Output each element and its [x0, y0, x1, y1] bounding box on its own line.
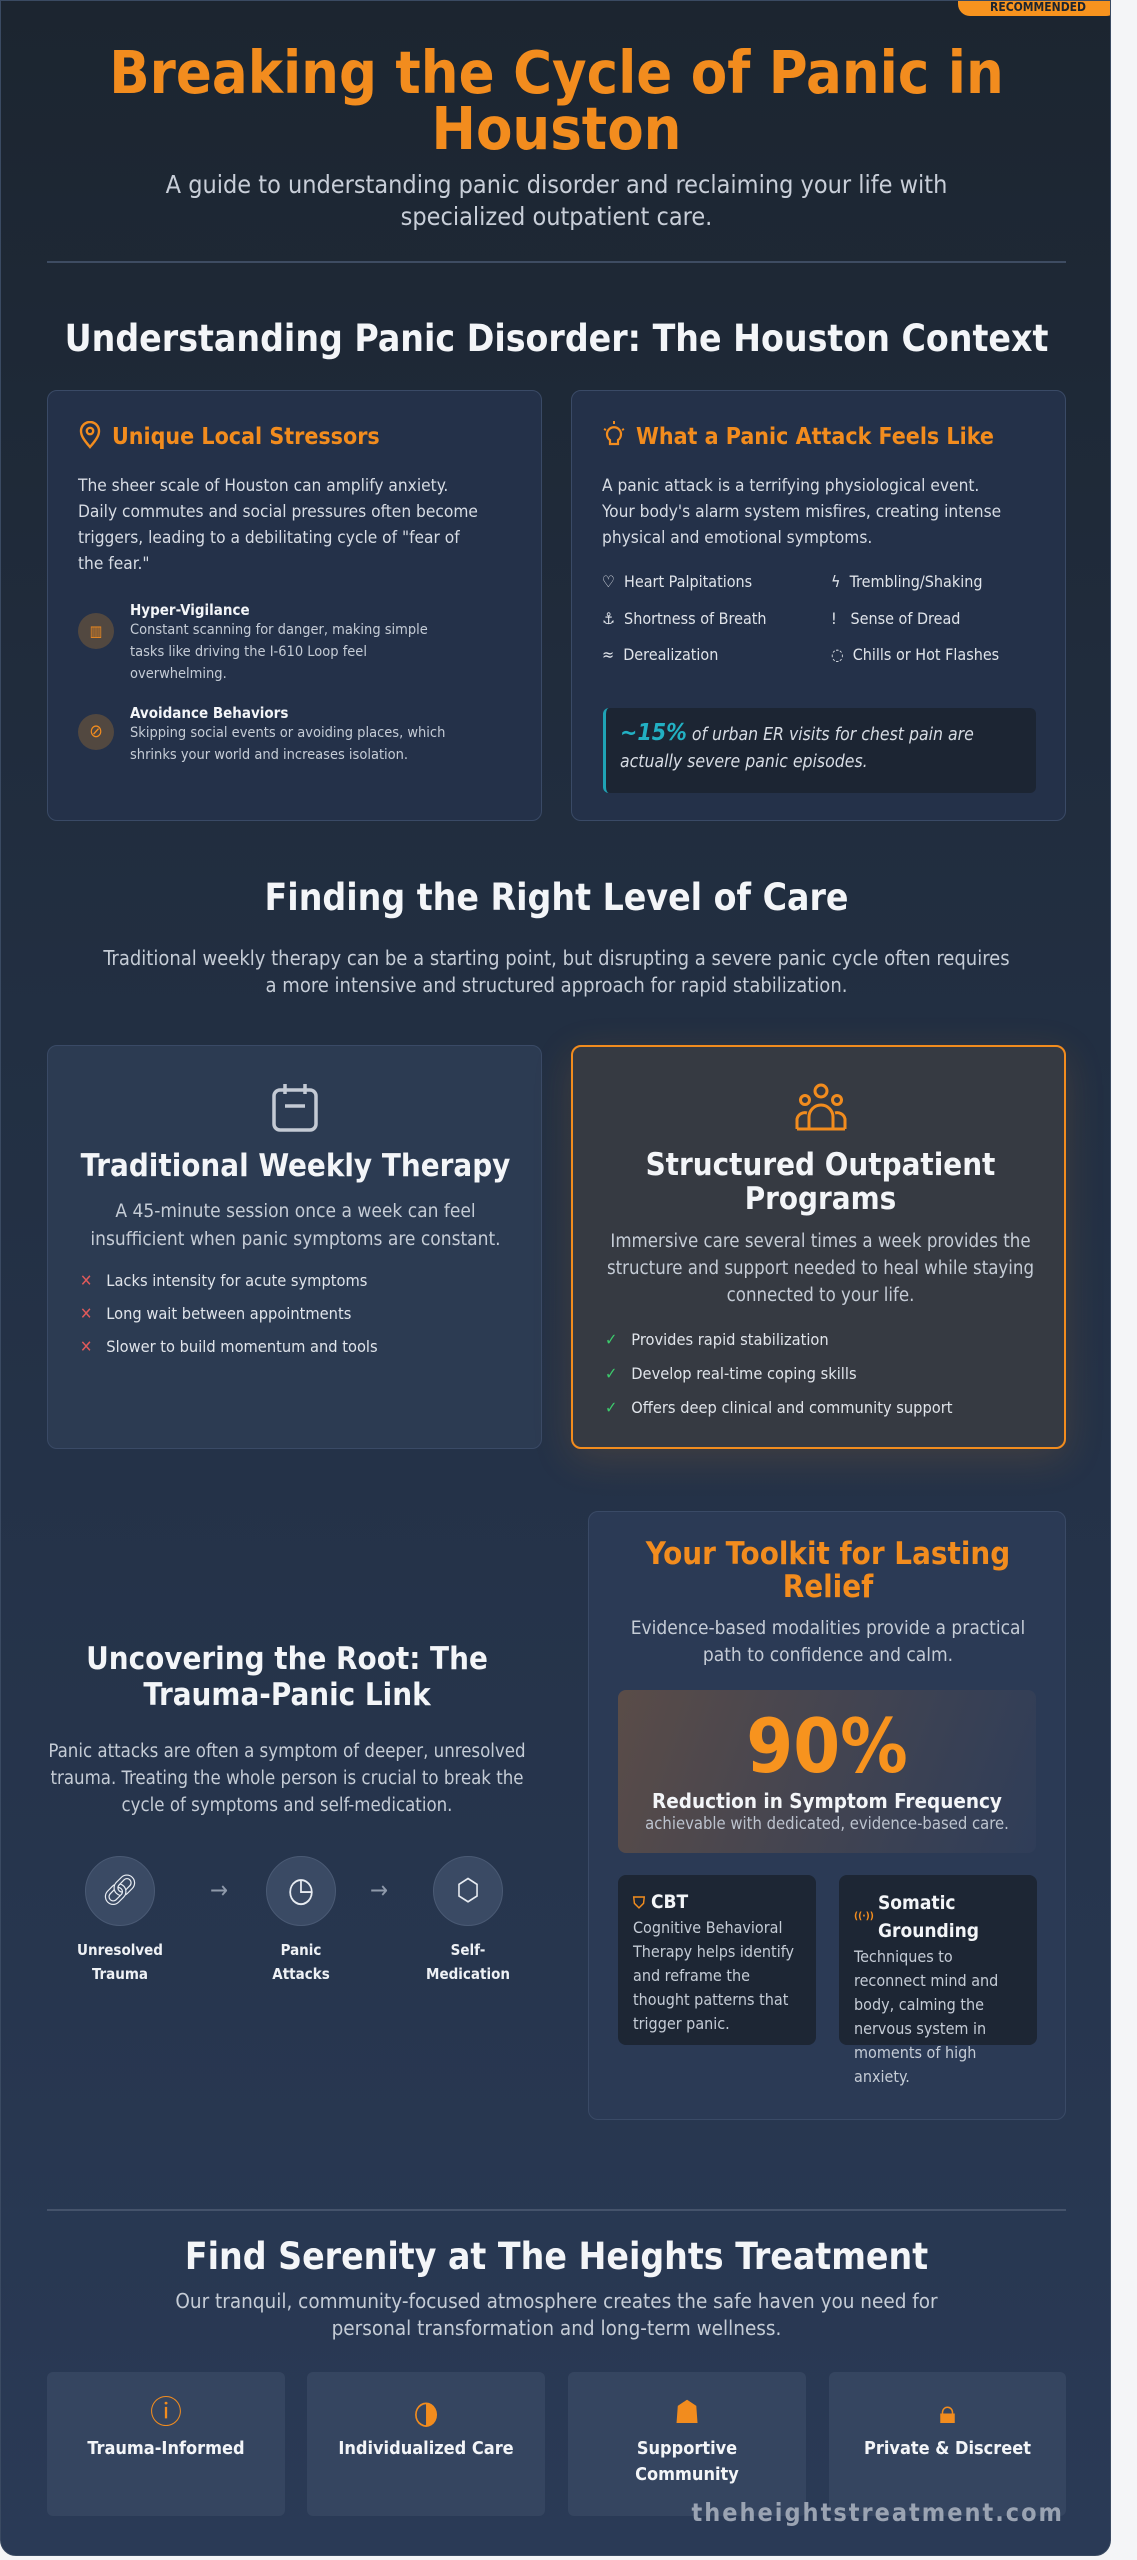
icon: ban: ⊘ [89, 721, 103, 742]
heading: stressors: Unique Local Stressors [112, 424, 380, 450]
feature: individualized [307, 2372, 545, 2516]
card: somatic [839, 1875, 1037, 2045]
step: trauma: Trauma [92, 1965, 148, 1983]
arrow: → [370, 1876, 388, 1904]
feature: trauma-informed [47, 2372, 285, 2516]
icon: chart: ▥ [90, 622, 102, 640]
step: panic attacks: Panic [281, 1941, 321, 1959]
symptoms grid: ! Sense of Dread [831, 609, 960, 628]
heading: find serenity: Find Serenity at The Heights Treatment [185, 2235, 928, 2278]
panel: unique local stressors: shrinks your world and increases isolation. [130, 747, 408, 763]
panel: structured outpatient [571, 1045, 1066, 1449]
icon: calendar [272, 1084, 318, 1132]
card: somatic: ((·)) [854, 1911, 874, 1922]
feature: private: Private & Discreet [864, 2438, 1031, 2459]
features row [47, 2372, 1066, 2516]
flow: cycle [77, 1856, 510, 1983]
text: feels body: physical and emotional symptoms. [602, 528, 872, 548]
text: serenity: Our tranquil, community-focused atmosphere creates the safe haven you need for personal transformation and long-term wellness. [175, 2289, 938, 2340]
heading: Uncovering the Root: The Trauma-Panic Link [86, 1641, 488, 1713]
text: stressors body: the fear." [78, 554, 150, 574]
badge: recommended [958, 0, 1118, 16]
text: feels body [602, 476, 1001, 548]
stat: 90% [618, 1690, 1036, 1853]
item: hyper-vigilance [78, 601, 428, 682]
title: Breaking the Cycle of Panic in Houston [109, 38, 1004, 163]
feature: community: ☗ [674, 2393, 700, 2431]
text: Evidence-based modalities provide a practical path to confidence and calm. [631, 1617, 1025, 1666]
list: pros: ✓ Develop real-time coping skills [605, 1364, 857, 1383]
text: care intro: a more intensive and structured approach for rapid stabilization. [266, 973, 847, 997]
step: panic attacks [266, 1856, 336, 1983]
list: pros: ✓ Provides rapid stabilization [605, 1330, 829, 1349]
feature: private: 🔒︎ [939, 2393, 956, 2431]
step: self-medication: Self- [451, 1941, 485, 1959]
stat: 90%: Reduction in Symptom Frequency [652, 1789, 1002, 1813]
text: stressors body [78, 476, 478, 574]
step: panic attacks: ◷ [288, 1870, 314, 1910]
symptoms grid: ϟ Trembling/Shaking [831, 572, 982, 591]
text: Panic attacks are often a symptom of deeper, unresolved trauma. Treating the whole person is crucial to break the cycle of symptoms and self-medication. [48, 1741, 526, 1816]
text: stressors body: triggers, leading to a debilitating cycle of "fear of [78, 528, 460, 548]
stat: 90%: achievable with dedicated, evidence-based care. [645, 1814, 1009, 1833]
heading: Structured Outpatient Programs [646, 1147, 995, 1217]
icon: chart [78, 613, 114, 649]
text: stressors body: The sheer scale of Houston can amplify anxiety. [78, 476, 448, 496]
panel: unique local stressors: tasks like driving the I-610 Loop feel [130, 644, 367, 660]
card: CBT: ⛉ CBT [633, 1891, 688, 1913]
list: cons: ✕ Slower to build momentum and tools [80, 1337, 378, 1356]
list: cons: ✕ Lacks intensity for acute symptoms [80, 1271, 367, 1290]
panel: traditional therapy [47, 1045, 542, 1449]
feature: private [829, 2372, 1066, 2516]
symptoms grid: ♡ Heart Palpitations [602, 572, 752, 591]
arrow: → [210, 1876, 228, 1904]
section: trauma-panic link [48, 1641, 526, 1983]
step: self-medication [426, 1856, 510, 1983]
step: self-medication: Medication [426, 1965, 510, 1983]
feature: community [568, 2372, 806, 2516]
heading: Your Toolkit for Lasting Relief [646, 1536, 1010, 1605]
feature: community: Supportive [637, 2438, 737, 2459]
symptoms grid: ≈ Derealization [602, 645, 718, 664]
card: CBT: Cognitive Behavioral Therapy helps identify and reframe the thought patterns that trigger panic. [633, 1918, 794, 2033]
feature: individualized: Individualized Care [338, 2438, 514, 2459]
panel: unique local stressors: overwhelming. [130, 666, 227, 682]
heading: finding right level: Finding the Right Level of Care [265, 876, 848, 919]
panel: unique local stressors: Hyper-Vigilance [130, 601, 250, 619]
heading: Traditional Weekly Therapy [81, 1148, 510, 1184]
feature: community: Community [635, 2464, 739, 2485]
step: panic attacks: Attacks [272, 1965, 330, 1983]
text: A 45-minute session once a week can feel insufficient when panic symptoms are constant. [90, 1200, 501, 1250]
badge: recommended: RECOMMENDED [990, 0, 1086, 14]
symptoms grid [602, 572, 999, 664]
card: CBT [618, 1875, 816, 2045]
text: care intro: Traditional weekly therapy can be a starting point, but disrupting a severe panic cycle often requires [103, 946, 1010, 970]
panel: unique local stressors: Constant scanning for danger, making simple [130, 622, 428, 638]
list: cons [80, 1271, 378, 1356]
card: somatic: Somatic Grounding [878, 1892, 979, 1942]
item: avoidance [78, 704, 445, 763]
text: feels body: A panic attack is a terrifying physiological event. [602, 476, 979, 496]
subtitle: A guide to understanding panic disorder and reclaiming your life with specialized outpatient care. [166, 170, 947, 231]
stat: 90%: 90% [746, 1702, 908, 1790]
feature: individualized: ◑ [413, 2393, 439, 2431]
list: cons: ✕ Long wait between appointments [80, 1304, 351, 1323]
symptoms grid: ◌ Chills or Hot Flashes [831, 645, 999, 664]
text: care intro [103, 946, 1010, 997]
panel: unique local stressors: Skipping social events or avoiding places, which [130, 725, 445, 741]
card: somatic: Techniques to reconnect mind and body, calming the nervous system in moments of high anxiety. [854, 1947, 998, 2086]
callout: 15% [603, 708, 1036, 793]
panel: unique local stressors: Avoidance Behaviors [130, 704, 288, 722]
panel: unique local stressors [47, 390, 542, 821]
feature: trauma-informed: ⓘ [150, 2393, 182, 2431]
icon: group [796, 1084, 846, 1130]
watermark: theheightstreatment.com [691, 2498, 1064, 2527]
heading: feels like: What a Panic Attack Feels Like [636, 424, 994, 450]
panel: panic attack feels like [571, 390, 1066, 821]
list: pros: ✓ Offers deep clinical and community support [605, 1398, 952, 1417]
text: feels body: Your body's alarm system misfires, creating intense [602, 502, 1001, 522]
step: trauma [77, 1856, 163, 1983]
step: trauma: Unresolved [77, 1941, 163, 1959]
feature: trauma-informed: Trauma-Informed [87, 2438, 245, 2459]
heading: understanding: Understanding Panic Disorder: The Houston Context [65, 317, 1048, 360]
text: Immersive care several times a week provides the structure and support needed to heal while staying connected to your life. [607, 1231, 1034, 1306]
step: self-medication: ⬡ [456, 1873, 480, 1908]
symptoms grid: ⚓ Shortness of Breath [602, 609, 767, 628]
callout: 15%: ~15% of urban ER visits for chest pain are actually severe panic episodes. [620, 720, 974, 772]
text: stressors body: Daily commutes and social pressures often become [78, 502, 478, 522]
step: trauma: 🔗︎ [101, 1873, 139, 1908]
panel: toolkit [588, 1511, 1066, 2120]
icon: ban [78, 714, 114, 750]
list: pros [605, 1330, 952, 1417]
